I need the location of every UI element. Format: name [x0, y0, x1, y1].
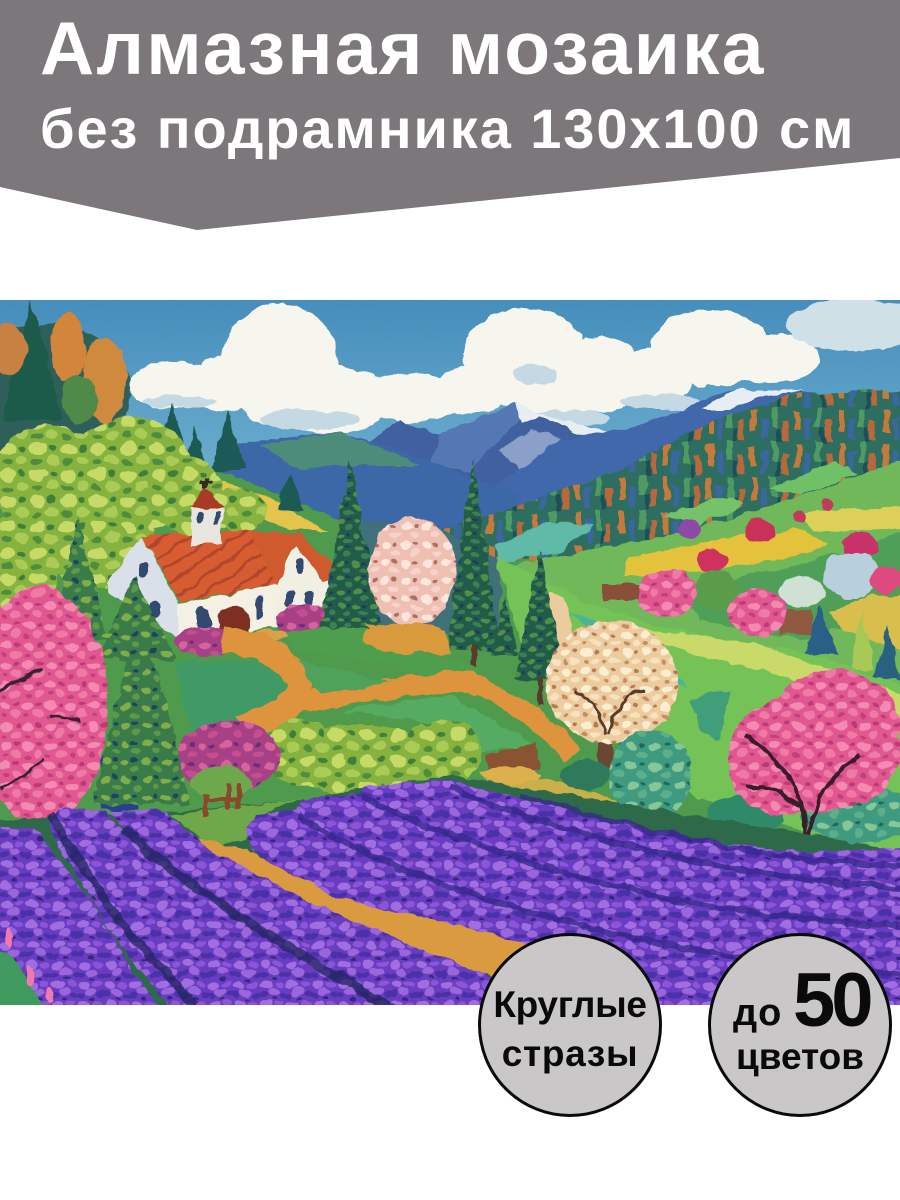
clouds [127, 299, 900, 434]
left foreground pink tree and evergreen [0, 587, 192, 823]
badge: up to 50 colors: до [733, 992, 782, 1034]
rolling hills [494, 460, 900, 686]
mountains [370, 388, 820, 506]
badge: round rhinestones [478, 933, 662, 1117]
title: Алмазная мозаика [40, 6, 766, 90]
badge: round rhinestones: стразы [502, 1033, 638, 1074]
cypress and blossom trees [320, 458, 572, 706]
lower field ground [0, 774, 884, 1005]
church [107, 477, 347, 640]
dirt track [198, 838, 530, 990]
autumn trees top-left [0, 300, 130, 467]
badge: up to 50 colors: цветов [736, 1036, 864, 1077]
ground [0, 472, 500, 576]
big cream blossom tree [546, 620, 678, 772]
small left evergreen in front of church [95, 575, 175, 660]
far cypress row [158, 405, 304, 510]
lavender rows left [0, 806, 492, 1005]
dark evergreen left [61, 516, 107, 640]
ground base [502, 559, 822, 836]
badge: up to 50 colors [708, 933, 892, 1117]
lavender field right [245, 780, 900, 1005]
subtitle: без подрамника 130х100 см [40, 97, 855, 160]
foreground grass and buds [0, 929, 54, 1010]
badge: round rhinestones: Круглые [493, 984, 647, 1025]
sky [0, 300, 900, 468]
lime trees left of church [0, 417, 266, 617]
lavender row shadows [50, 788, 900, 1010]
fence [203, 783, 241, 817]
shrubs [176, 623, 692, 819]
big pink tree on right [705, 670, 900, 843]
header banner [0, 0, 900, 230]
badge: up to 50 colors: 50 [793, 958, 870, 1043]
lawns and orange paths [176, 623, 618, 802]
forested right slope [440, 388, 900, 580]
distant blossoming trees and barns [603, 499, 900, 680]
church flower beds [174, 605, 340, 657]
painting: lavender landscape [0, 300, 900, 1005]
right edge backing [885, 395, 900, 570]
green meadow [495, 555, 900, 870]
yellow hill behind church [220, 482, 325, 530]
left blue hill [218, 432, 494, 530]
